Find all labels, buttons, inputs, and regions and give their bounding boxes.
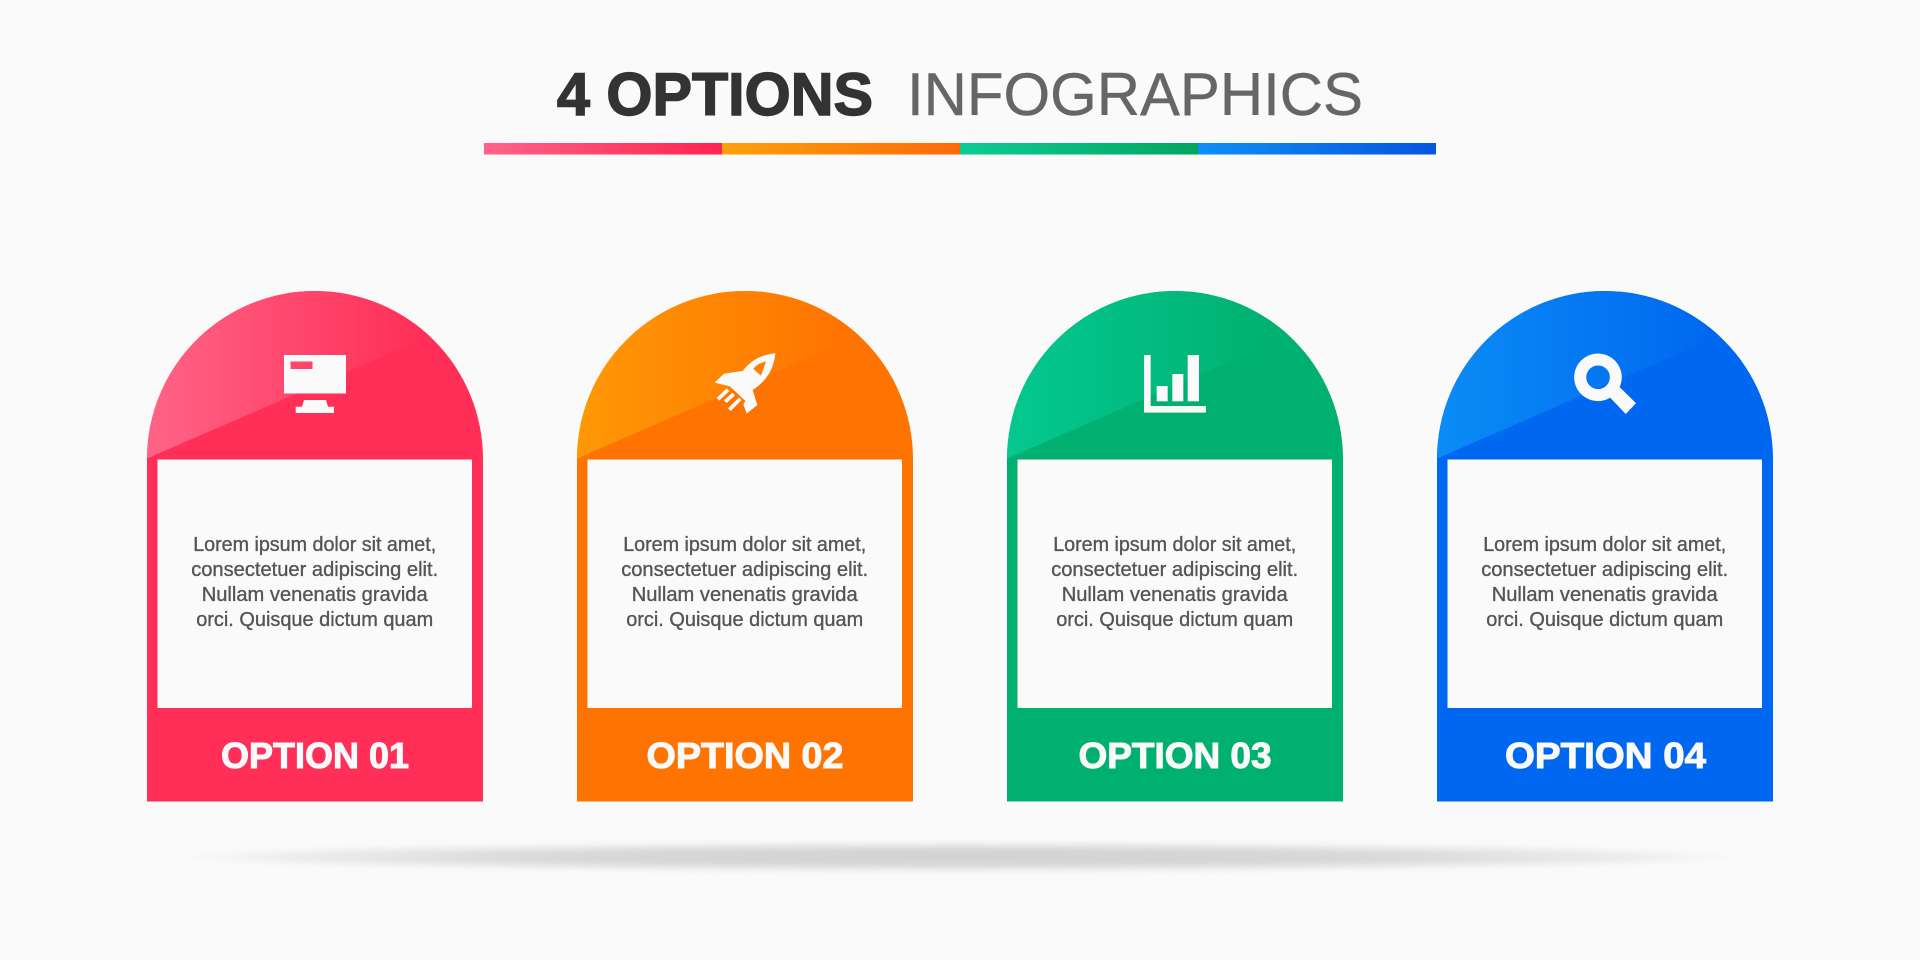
panel: option 02: [577, 291, 913, 802]
icon: magnifier: [1574, 354, 1636, 414]
panel: option 03: [1007, 291, 1343, 802]
body text: Nullam venenatis gravida: [1062, 583, 1288, 606]
text box: [158, 460, 472, 708]
text box: [1018, 460, 1332, 708]
panel: option 04: [1437, 291, 1773, 802]
option label: OPTION 02: [646, 735, 844, 776]
body text: Lorem ipsum dolor sit amet,: [1053, 533, 1296, 556]
body text: consectetuer adipiscing elit.: [191, 558, 438, 581]
body text: orci. Quisque dictum quam: [626, 608, 863, 631]
body text: Nullam venenatis gravida: [632, 583, 858, 606]
body text: orci. Quisque dictum quam: [1056, 608, 1293, 631]
body text: Lorem ipsum dolor sit amet,: [1483, 533, 1726, 556]
ground shadow: [175, 842, 1745, 872]
arch card: [1437, 291, 1773, 802]
gloss highlight: [577, 291, 859, 458]
icon: rocket: [715, 353, 775, 414]
body text: [1481, 533, 1728, 631]
arch card: [147, 291, 483, 802]
body text: Nullam venenatis gravida: [1492, 583, 1718, 606]
body text: [1051, 533, 1298, 631]
icon: bar chart: [1144, 355, 1206, 413]
text box: [588, 460, 902, 708]
body text: orci. Quisque dictum quam: [196, 608, 433, 631]
body text: consectetuer adipiscing elit.: [1481, 558, 1728, 581]
title: [557, 61, 1363, 128]
option label: OPTION 04: [1505, 735, 1706, 776]
title: INFOGRAPHICS: [907, 61, 1363, 128]
text box: [1448, 460, 1762, 708]
body text: [191, 533, 438, 631]
panel: option 01: [147, 291, 483, 802]
gloss highlight: [1437, 291, 1719, 458]
body text: Nullam venenatis gravida: [202, 583, 428, 606]
title: 4 OPTIONS: [557, 61, 873, 128]
option label: OPTION 03: [1078, 735, 1272, 776]
body text: [621, 533, 868, 631]
option label: OPTION 01: [221, 735, 409, 776]
body text: consectetuer adipiscing elit.: [1051, 558, 1298, 581]
icon: monitor: [284, 355, 346, 413]
gloss highlight: [147, 291, 429, 458]
arch card: [577, 291, 913, 802]
body text: consectetuer adipiscing elit.: [621, 558, 868, 581]
body text: Lorem ipsum dolor sit amet,: [193, 533, 436, 556]
gloss highlight: [1007, 291, 1289, 458]
body text: Lorem ipsum dolor sit amet,: [623, 533, 866, 556]
title underline: four colour bar: [484, 143, 1436, 154]
body text: orci. Quisque dictum quam: [1486, 608, 1723, 631]
arch card: [1007, 291, 1343, 802]
